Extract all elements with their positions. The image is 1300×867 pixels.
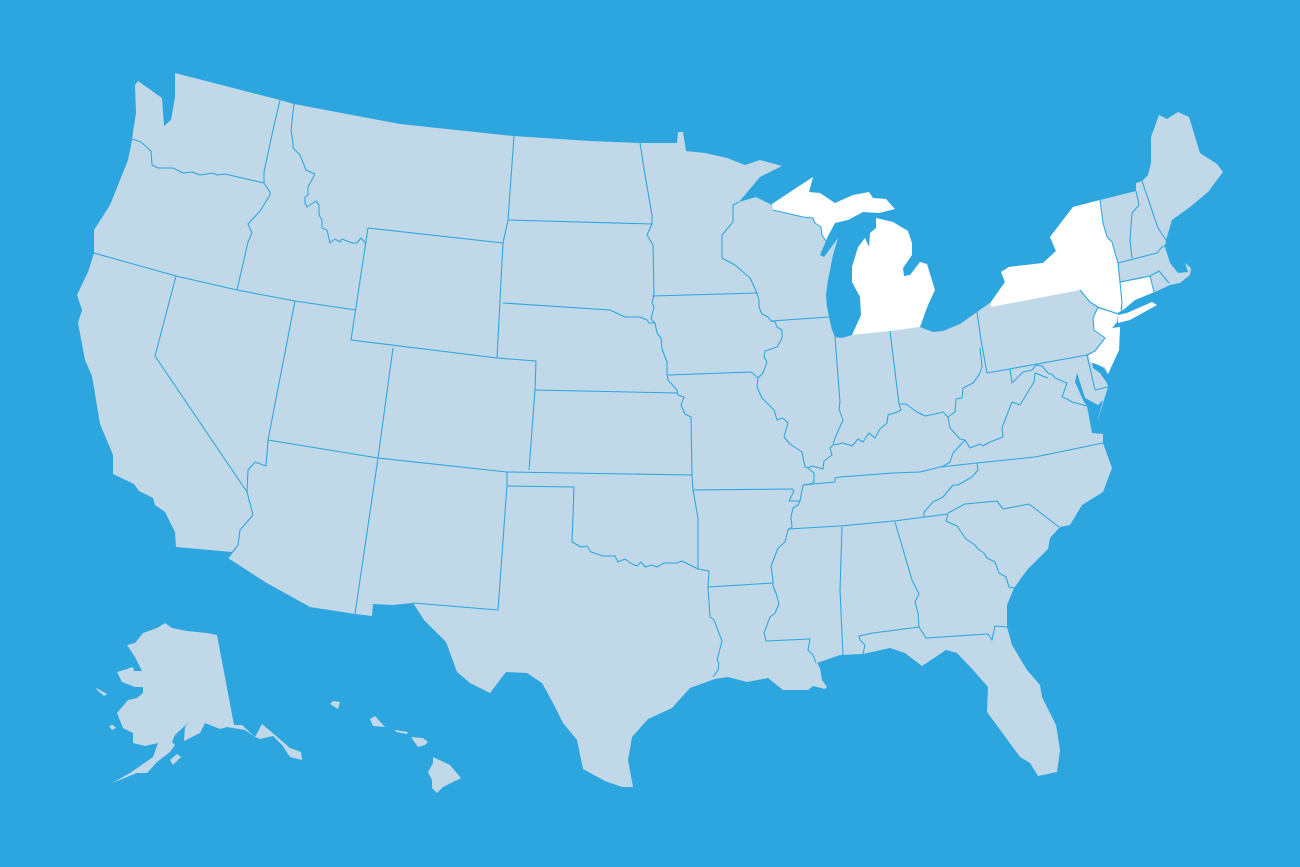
highlighted state: Michigan <box>772 177 935 335</box>
highlighted state: Connecticut <box>1120 277 1154 310</box>
contiguous states landmass <box>77 73 1223 787</box>
highlighted state: New York <box>991 200 1157 323</box>
Hawaii <box>330 701 461 793</box>
highlighted state: New Jersey <box>1089 309 1120 374</box>
state borders <box>94 100 1169 677</box>
Alaska <box>96 623 302 783</box>
